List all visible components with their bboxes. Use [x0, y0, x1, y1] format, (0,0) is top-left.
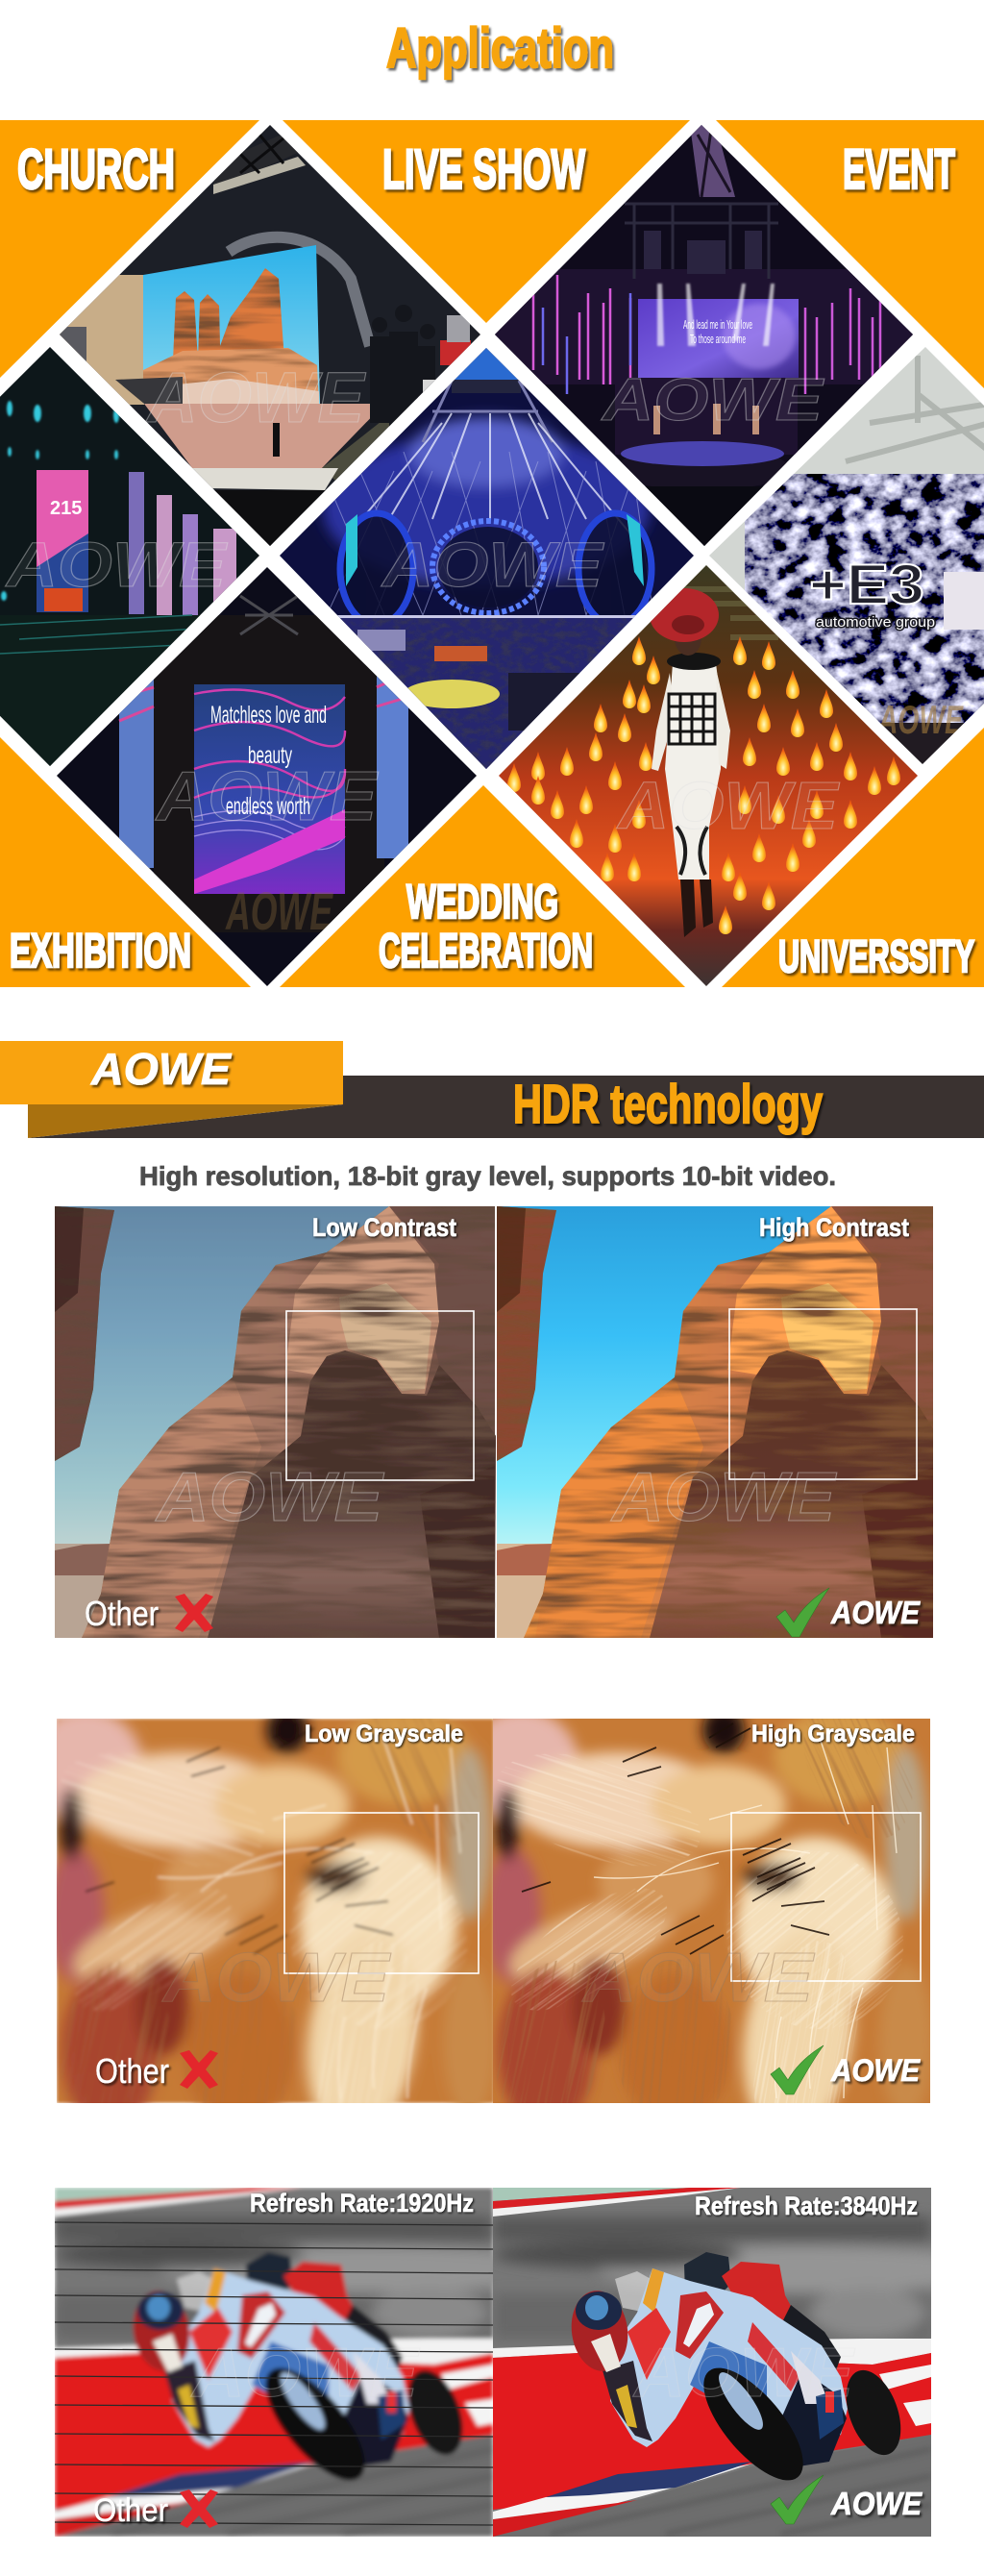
- watermark right: AOWE: [632, 2335, 855, 2412]
- caption: Refresh Rate 3840Hz: Refresh Rate:3840Hz: [695, 2192, 918, 2220]
- watermark left: AOWE: [190, 2335, 420, 2412]
- icon: red cross: [180, 2489, 218, 2528]
- photo: fashion show with flames: [495, 562, 922, 990]
- photo: event stage: To those around me: [690, 332, 746, 346]
- watermark left: AOWE: [161, 1940, 391, 2017]
- photo: church LED screen: [48, 120, 490, 557]
- photo: high contrast canyon: [497, 1206, 933, 1638]
- caption: Low Grayscale: Low Grayscale: [305, 1721, 463, 1747]
- logo: AOWE: AOWE: [830, 2486, 922, 2521]
- photo: exhibition screen with lyrics: endless worth: [226, 793, 310, 820]
- watermark: AOWE: [616, 768, 840, 843]
- label: Other: Other: [85, 1594, 159, 1633]
- photo: motorcycle with scan lines: [55, 2188, 493, 2537]
- photo: central truss stage: [274, 341, 701, 774]
- photo: exhibition screen with lyrics: AOWE: [225, 880, 333, 941]
- label: LIVE SHOW: LIVE SHOW: [382, 138, 585, 201]
- icon: green check: [771, 2045, 824, 2094]
- photo: exhibition hall LED wall: +E3: [809, 554, 924, 616]
- orange corner and wedge shapes: [0, 120, 984, 987]
- subtitle: High resolution, 18-bit gray level, supports 10-bit video.: [139, 1161, 836, 1191]
- panel: refresh rate comparison: [55, 2188, 984, 2537]
- photo: exhibition screen with lyrics: beauty: [248, 742, 292, 769]
- photo: exhibition screen with lyrics: Matchless love and: [210, 702, 327, 729]
- watermark: AOWE: [381, 529, 604, 600]
- photo: left concert stage: [0, 341, 269, 774]
- label: CHURCH: CHURCH: [17, 138, 175, 201]
- icon: green check: [776, 1588, 829, 1637]
- watermark: AOWE: [5, 529, 228, 600]
- logo: AOWE: AOWE: [90, 1044, 232, 1094]
- highlight box right: [731, 1813, 921, 1981]
- panel: grayscale comparison: [28, 1676, 940, 2158]
- photo: sharp motorcycle: [493, 2188, 931, 2537]
- photo: left concert stage: 215: [50, 498, 82, 519]
- highlight box right: [729, 1309, 917, 1479]
- logo: AOWE: AOWE: [830, 2053, 922, 2088]
- icon: green check: [771, 2475, 824, 2524]
- watermark left: AOWE: [155, 1459, 384, 1536]
- watermark right: AOWE: [610, 1459, 837, 1536]
- icon: red cross: [180, 2050, 218, 2089]
- label: CELEBRATION: CELEBRATION: [379, 924, 593, 978]
- photo: exhibition screen with lyrics: [53, 562, 480, 990]
- watermark right: AOWE: [581, 1940, 815, 2017]
- photo: low grayscale feathers: [57, 1719, 493, 2103]
- panel: application collage: [0, 120, 984, 990]
- photo: low contrast canyon: [55, 1206, 496, 1638]
- caption: High Contrast: High Contrast: [759, 1213, 909, 1242]
- label: WEDDING: WEDDING: [406, 875, 558, 929]
- highlight box left: [284, 1813, 479, 1973]
- watermark: AOWE: [155, 758, 379, 835]
- photo: event stage: And lead me in Your love: [683, 317, 752, 332]
- title: Application: Application: [386, 17, 614, 80]
- heading: HDR technology: HDR technology: [513, 1074, 823, 1135]
- label: Other: Other: [93, 2492, 168, 2529]
- caption: Low Contrast: Low Contrast: [312, 1213, 456, 1242]
- highlight box left: [286, 1311, 474, 1480]
- photo: exhibition hall LED wall: automotive group: [816, 614, 935, 631]
- logo: AOWE: AOWE: [830, 1595, 921, 1630]
- icon: red cross: [175, 1594, 213, 1632]
- caption: Refresh Rate 1920Hz: Refresh Rate:1920Hz: [250, 2189, 474, 2217]
- photo: high grayscale feathers: [493, 1719, 930, 2103]
- watermark: AOWE: [145, 358, 367, 437]
- photo: exhibition hall LED wall: [706, 341, 984, 769]
- caption: High Grayscale: High Grayscale: [751, 1721, 915, 1747]
- photo: event stage: [490, 120, 918, 553]
- label: EXHIBITION: EXHIBITION: [10, 924, 191, 978]
- section banner: HDR technology: [0, 1041, 984, 1138]
- watermark: AOWE: [601, 367, 824, 433]
- label: Other: Other: [95, 2051, 169, 2091]
- panel: contrast comparison: [55, 1206, 938, 1638]
